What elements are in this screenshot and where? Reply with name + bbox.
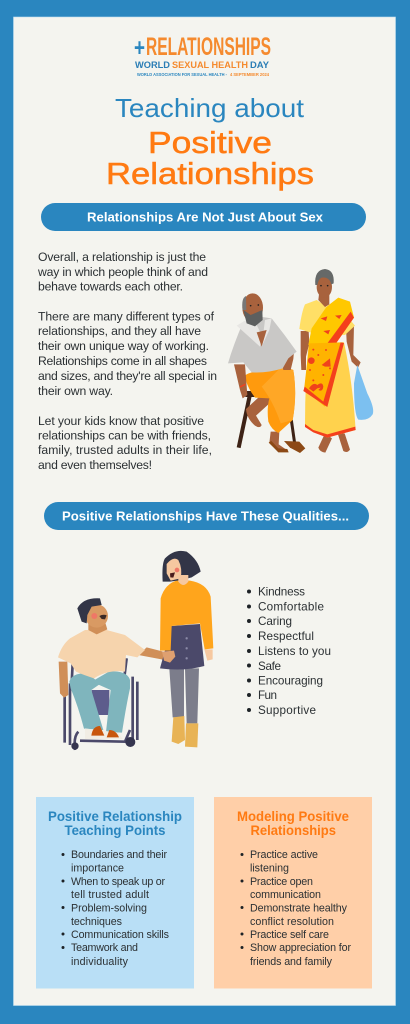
list: qualities bbox=[247, 586, 331, 717]
list: qualities: Listens to you bbox=[258, 645, 331, 658]
list: teaching points: Communication skills bbox=[71, 929, 169, 941]
shoes bbox=[85, 728, 123, 739]
banner: relationships are not just about sex: Relationships Are Not Just About Sex bbox=[87, 210, 324, 224]
woman's skirt bbox=[305, 342, 356, 438]
list: teaching points: techniques bbox=[71, 916, 122, 928]
list: modeling relationships: conflict resolution bbox=[250, 916, 334, 928]
text block: intro paragraphs bbox=[37, 250, 217, 472]
illustration: man in wheelchair holding hands with woman bbox=[58, 551, 213, 750]
list: qualities: Respectful bbox=[258, 630, 314, 643]
list: teaching points: When to speak up or bbox=[71, 876, 165, 888]
list: qualities: Safe bbox=[258, 660, 281, 673]
man's arms bbox=[59, 662, 68, 698]
text block: intro paragraphs: relationships, and they all have bbox=[38, 324, 201, 338]
heading: modeling relationships: Relationships bbox=[250, 822, 336, 838]
heading: teaching points: Positive Relationship bbox=[48, 808, 182, 824]
list: teaching points bbox=[62, 849, 169, 968]
list: modeling relationships: listening bbox=[250, 862, 289, 874]
list: teaching points: individuality bbox=[71, 956, 129, 968]
logo: +Relationships World Sexual Health Day: WORLD ASSOCIATION FOR SEXUAL HEALTH - bbox=[137, 72, 227, 77]
list: qualities: Caring bbox=[258, 615, 292, 628]
woman's legs bbox=[169, 668, 199, 723]
text block: intro paragraphs: their own unique way of working. bbox=[38, 339, 209, 353]
list: modeling relationships: Demonstrate healthy bbox=[250, 902, 348, 914]
sari upper bbox=[308, 298, 354, 345]
illustration: elderly couple bbox=[228, 269, 373, 453]
list: qualities: Comfortable bbox=[258, 600, 324, 614]
shirt bbox=[58, 630, 145, 678]
list: qualities: Supportive bbox=[258, 704, 316, 717]
man's legs bbox=[69, 673, 103, 730]
woman's hands bbox=[204, 649, 213, 661]
list: modeling relationships: communication bbox=[250, 889, 321, 901]
logo: +Relationships World Sexual Health Day: DAY bbox=[250, 60, 269, 70]
woman's neck bbox=[318, 294, 329, 307]
text block: intro paragraphs: Relationships come in all shapes bbox=[38, 354, 207, 368]
logo: +Relationships World Sexual Health Day: SEXUAL HEALTH bbox=[172, 60, 248, 70]
list: modeling relationships bbox=[240, 849, 351, 968]
list: modeling relationships: Practice active bbox=[250, 849, 318, 861]
stool and sandals bbox=[239, 391, 305, 453]
sari motifs bbox=[308, 315, 342, 392]
bracelet bbox=[240, 384, 245, 387]
wheelchair bbox=[65, 658, 137, 750]
banner: positive relationships qualities bbox=[44, 502, 369, 530]
title bbox=[106, 93, 314, 191]
banner: positive relationships qualities: Positive Relationships Have These Qualities... bbox=[62, 508, 349, 524]
text block: intro paragraphs: and sizes, and they're all special in bbox=[38, 369, 217, 383]
text block: intro paragraphs: their own way. bbox=[38, 384, 113, 398]
list: modeling relationships: friends and family bbox=[250, 956, 333, 968]
list: teaching points: importance bbox=[71, 862, 124, 874]
title: Positive bbox=[148, 125, 272, 160]
man's neck and head bbox=[88, 622, 107, 634]
boots bbox=[172, 716, 185, 744]
list: modeling relationships: Show appreciation for bbox=[250, 942, 351, 954]
woman's neck and face bbox=[178, 575, 188, 585]
logo: +Relationships World Sexual Health Day: + bbox=[134, 34, 145, 62]
man's crossed leg bbox=[246, 390, 275, 427]
list: teaching points: Problem-solving bbox=[71, 902, 147, 914]
title: Relationships bbox=[106, 156, 314, 191]
text block: intro paragraphs: There are many different types of bbox=[38, 310, 215, 324]
list: qualities: Fun bbox=[258, 689, 277, 702]
text block: intro paragraphs: behave towards each other. bbox=[38, 280, 183, 294]
list: qualities: Encouraging bbox=[258, 675, 323, 688]
text block: intro paragraphs: family, trusted adults in their life, bbox=[38, 443, 212, 457]
blouse bbox=[299, 300, 355, 335]
panel: modeling relationships bbox=[214, 797, 372, 988]
text block: intro paragraphs: and even themselves! bbox=[38, 458, 152, 472]
heading: teaching points: Teaching Points bbox=[64, 822, 166, 838]
text block: intro paragraphs: relationships can be with friends, bbox=[38, 428, 211, 442]
logo: +Relationships World Sexual Health Day: 4 SEPTEMBER 2024 bbox=[230, 72, 269, 77]
heading: modeling relationships: Modeling Positive bbox=[237, 808, 349, 824]
panel: teaching points bbox=[36, 797, 194, 988]
logo: +Relationships World Sexual Health Day: RELATIONSHIPS bbox=[146, 33, 271, 61]
text block: intro paragraphs: Let your kids know that positive bbox=[38, 414, 204, 428]
shirt bbox=[228, 317, 297, 372]
sweater bbox=[160, 580, 213, 651]
list: teaching points: Boundaries and their bbox=[71, 849, 167, 861]
title: Teaching about bbox=[115, 93, 305, 123]
logo: +Relationships World Sexual Health Day bbox=[134, 33, 271, 77]
dhoti bbox=[245, 367, 295, 433]
woman's hair bbox=[162, 551, 201, 582]
woman's arms bbox=[301, 331, 309, 370]
list: modeling relationships: Practice self care bbox=[250, 929, 329, 941]
logo: +Relationships World Sexual Health Day: WORLD bbox=[135, 60, 171, 70]
sari drape bbox=[304, 342, 343, 407]
list: teaching points: tell trusted adult bbox=[71, 889, 149, 901]
man's arms bbox=[234, 364, 247, 398]
woman's legs and feet bbox=[318, 433, 350, 453]
blue bag bbox=[354, 365, 373, 420]
heading: teaching points bbox=[48, 808, 182, 838]
list: teaching points: Teamwork and bbox=[71, 942, 138, 954]
woman's head bbox=[317, 276, 332, 298]
text block: intro paragraphs: Overall, a relationship is just the bbox=[38, 250, 206, 264]
banner: relationships are not just about sex bbox=[41, 203, 366, 231]
list: qualities: Kindness bbox=[258, 586, 305, 599]
heading: modeling relationships bbox=[237, 808, 349, 838]
woman's skirt bbox=[160, 624, 204, 670]
text block: intro paragraphs: way in which people think of and bbox=[37, 265, 208, 279]
man's head bbox=[242, 293, 263, 322]
list: modeling relationships: Practice open bbox=[250, 876, 313, 888]
